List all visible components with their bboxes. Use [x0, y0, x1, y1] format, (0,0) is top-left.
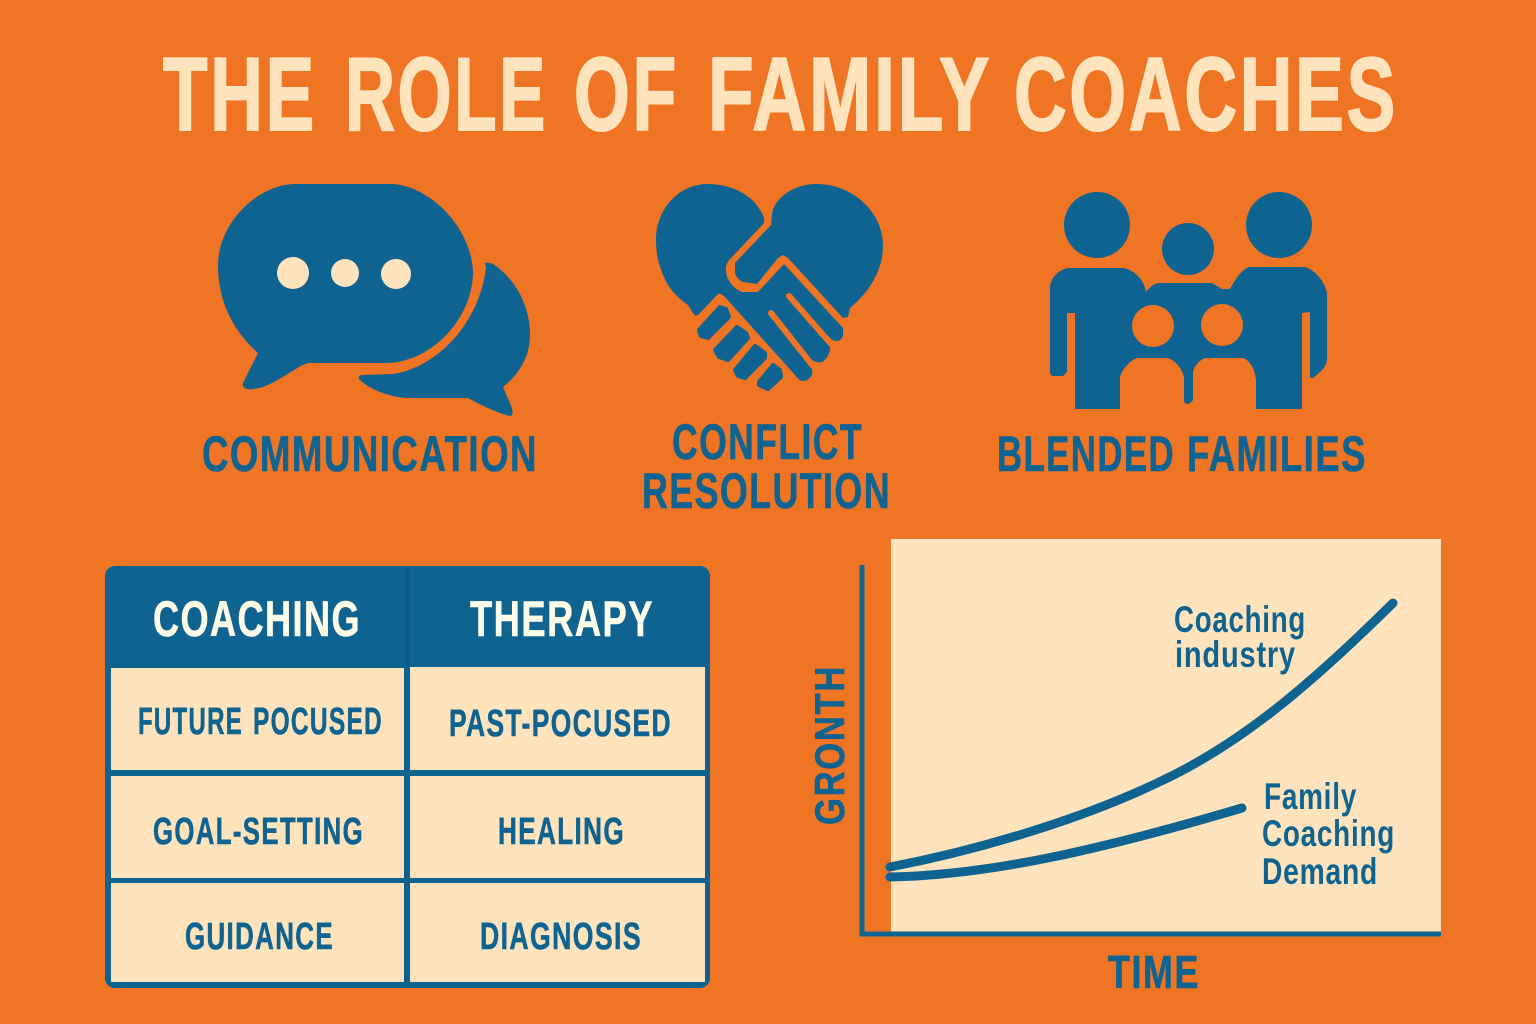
title — [163, 37, 1398, 153]
label: coaching industry: industry — [1175, 634, 1296, 675]
row: guidance and diagnosis: GUIDANCE — [185, 916, 334, 958]
icon: speech bubbles — [218, 184, 530, 416]
title: OF — [574, 37, 679, 153]
label: family coaching demand: Coaching — [1262, 813, 1395, 854]
row: future focused: PAST-POCUSED — [449, 703, 672, 745]
panel: blended families — [997, 192, 1367, 482]
speech dots — [277, 257, 411, 289]
line: family coaching demand — [890, 808, 1242, 877]
icon: heart handshake — [656, 184, 883, 389]
label: coaching industry — [1174, 599, 1306, 675]
label: conflict resolution: CONFLICT — [672, 414, 863, 470]
label: conflict resolution: RESOLUTION — [642, 463, 891, 519]
row: goal-setting and healing: HEALING — [498, 811, 625, 853]
chart background — [891, 539, 1441, 933]
label: family coaching demand — [1262, 776, 1395, 892]
small fingers — [699, 307, 781, 389]
row: guidance and diagnosis: DIAGNOSIS — [480, 916, 642, 958]
title: THE — [163, 37, 317, 153]
label: blended families — [997, 426, 1367, 482]
row: goal-setting and healing: GOAL-SETTING — [153, 811, 364, 853]
handshake finger gaps — [771, 296, 832, 366]
title: FAMILY — [708, 37, 992, 153]
axis label: growth: GRONTH — [806, 665, 853, 825]
label: communication: COMMUNICATION — [202, 426, 538, 482]
child cut-outs — [1132, 304, 1243, 347]
label: family coaching demand: Family — [1264, 776, 1357, 817]
row: future focused: POCUSED — [253, 701, 383, 743]
row: guidance and diagnosis — [111, 883, 705, 982]
label: blended families: FAMILIES — [1187, 426, 1367, 482]
header: coaching: COACHING — [153, 591, 361, 647]
axis label: time: TIME — [1108, 946, 1200, 998]
row: future focused: FUTURE — [138, 701, 243, 743]
label: conflict resolution — [642, 414, 891, 519]
header divider — [405, 567, 409, 667]
row: future focused — [111, 667, 705, 770]
panel: conflict resolution — [642, 184, 891, 519]
label: blended families: BLENDED — [997, 426, 1175, 482]
line: coaching industry — [890, 603, 1393, 867]
comparison table — [105, 566, 710, 988]
label: family coaching demand: Demand — [1262, 851, 1378, 892]
growth chart — [806, 539, 1441, 998]
axes — [862, 565, 1441, 934]
icon: family — [1050, 192, 1327, 409]
title: ROLE — [345, 37, 548, 153]
row: goal-setting and healing — [111, 776, 705, 878]
label: coaching industry: Coaching — [1174, 599, 1306, 640]
panel: communication — [202, 184, 538, 482]
header: therapy: THERAPY — [470, 591, 654, 647]
